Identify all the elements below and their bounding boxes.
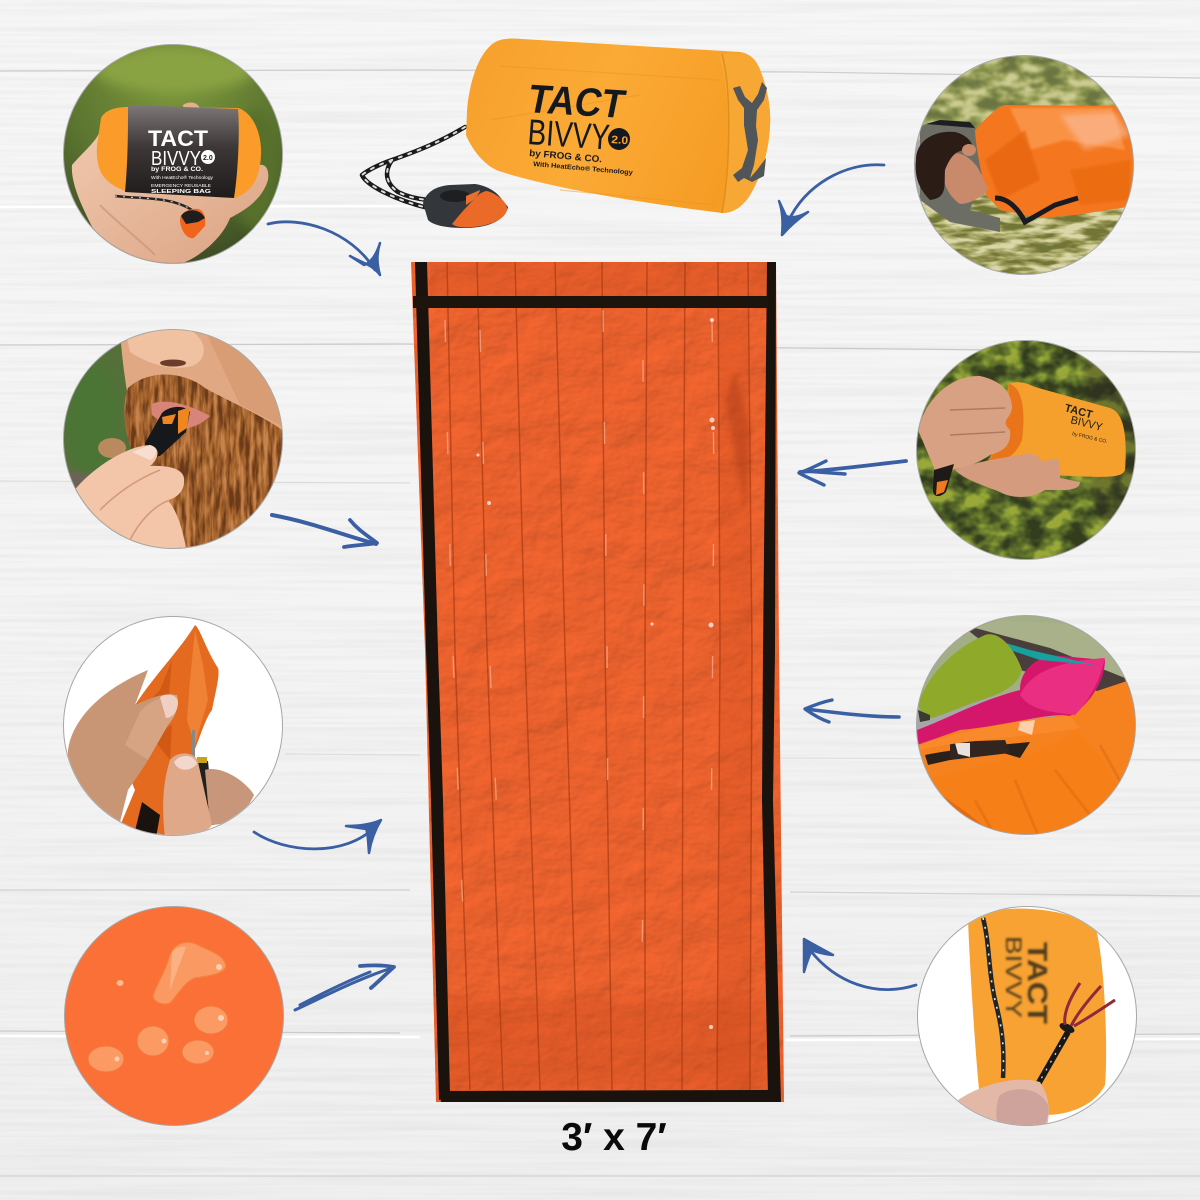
- sack printed logo: TACT: [524, 77, 629, 127]
- large water drop: [153, 942, 226, 1004]
- sack printed logo: 2.0: [611, 134, 629, 147]
- green pillow: [918, 634, 1022, 720]
- circle: bivvy over sleeping bag: [915, 615, 1140, 845]
- whistle: [423, 184, 508, 228]
- circle: puncture-resistant material test: [60, 615, 286, 841]
- screwdriver: [192, 730, 195, 757]
- label text: TACT: [148, 126, 209, 151]
- green backdrop: [60, 330, 150, 550]
- label text: BIVVY: [151, 148, 201, 170]
- whistle: [145, 407, 190, 456]
- blurred sack text: BIVVY: [1001, 936, 1026, 1018]
- fingertip: [958, 1080, 1049, 1130]
- circle: hands opening stuff sack: [915, 340, 1140, 562]
- red inner threads: [1065, 983, 1115, 1026]
- arrow: sleeping person circle to sheet: [779, 165, 884, 235]
- head: [942, 153, 988, 204]
- dimension label: 3′ x 7′: [561, 1116, 667, 1159]
- blurred sack text: [1001, 936, 1053, 1024]
- blurred orange sack: [968, 909, 1106, 1115]
- face: [120, 325, 290, 480]
- arrow: repair circle to sheet: [254, 820, 381, 853]
- circle: paracord with inner threads: [915, 905, 1140, 1130]
- sack printed logo: BIVVY: [526, 111, 611, 158]
- whistle cord: [362, 127, 465, 208]
- sheet surface with folds and crumple texture: [405, 255, 790, 1105]
- sack body: [466, 39, 770, 213]
- green blurred backdrop: [60, 40, 286, 266]
- top black strip: [413, 296, 768, 308]
- sack printed logo: by FROG & CO.: [529, 148, 602, 165]
- label text: by FROG & CO.: [151, 167, 203, 173]
- hand upper fingers: [918, 376, 1012, 470]
- circle: water droplets on fabric: [60, 905, 290, 1135]
- panel: unfolded orange bivvy sheet: [405, 255, 790, 1105]
- sleeping pad: [920, 121, 1000, 232]
- bivvy lower orange: [915, 680, 1140, 840]
- arrow: water drops circle to sheet: [295, 965, 394, 1010]
- hand lower fingers: [955, 454, 1080, 497]
- arrow: layered bag circle to sheet: [805, 700, 899, 722]
- pink sleeping bag: [917, 655, 1105, 745]
- sack printing: TACT: [1063, 402, 1094, 421]
- orange bag: [975, 105, 1140, 218]
- arrow: whistle circle to sheet: [272, 515, 377, 547]
- sack cord: [983, 918, 1003, 1078]
- sack end cap shading: [718, 53, 770, 213]
- product: orange stuff sack with whistle: [362, 39, 770, 228]
- orange pack body: [97, 107, 261, 198]
- cut cord: [1037, 1032, 1068, 1086]
- label text: SLEEPING BAG: [151, 189, 211, 195]
- left black strip: [415, 262, 450, 1100]
- rope knot: [98, 438, 126, 458]
- sack printed logo: [524, 77, 633, 177]
- small droplets: [116, 980, 124, 986]
- nose: [125, 330, 204, 368]
- bottom black strip: [439, 1090, 781, 1102]
- circle: man blowing whistle: [63, 329, 283, 549]
- sharp leaves foreground: [919, 195, 1129, 274]
- label text: EMERGENCY REUSABLE: [151, 183, 211, 188]
- frog logo on end: [733, 82, 767, 182]
- dark strip on sheet: [136, 802, 160, 834]
- orange sack: [985, 382, 1126, 477]
- sack printed logo: With HeatEcho® Technology: [533, 160, 633, 177]
- sack printing: by FROG & CO.: [1072, 431, 1108, 445]
- circle: pack held in palm: [60, 40, 286, 268]
- foliage backdrop: [915, 340, 1137, 562]
- black strap: [995, 198, 1078, 222]
- right hand: [205, 769, 254, 825]
- label text: With HeatEcho® Technology: [151, 175, 214, 180]
- label text: 2.0: [203, 155, 213, 162]
- label text: [148, 126, 215, 195]
- cord and whistle: [115, 196, 192, 210]
- teal lining: [995, 640, 1095, 665]
- whistle: [933, 464, 954, 496]
- hand: [72, 130, 268, 268]
- sack printing: [1066, 404, 1107, 443]
- circle: person sleeping in bivvy: [914, 55, 1134, 275]
- arrow: top-left circle to sheet: [268, 222, 380, 275]
- lips: [152, 402, 210, 430]
- arrow: stuff sack circle to sheet: [799, 461, 906, 485]
- right black strip: [762, 262, 781, 1102]
- fingers: [73, 445, 186, 552]
- sack printing: BIVVY: [1069, 414, 1104, 434]
- blurred sack text: TACT: [1022, 942, 1053, 1024]
- left hand: [68, 670, 178, 822]
- beard: [124, 374, 282, 548]
- blurred leaves backdrop: [918, 56, 1130, 140]
- dark label: [125, 105, 239, 198]
- orange plastic: [120, 625, 219, 835]
- arrow: cord circle to sheet: [804, 939, 916, 990]
- black strip fold: [925, 742, 1030, 765]
- tent backdrop: [915, 615, 1137, 695]
